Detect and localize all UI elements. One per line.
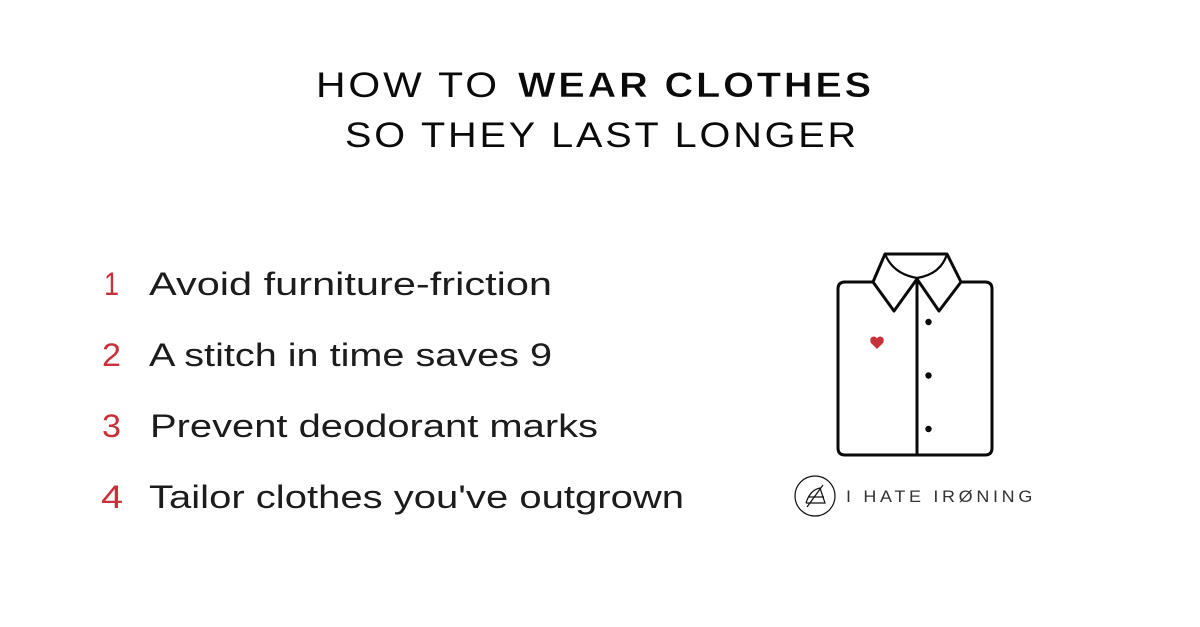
- list item 1: Avoid furniture-friction: [149, 266, 552, 302]
- list item 2: A stitch in time saves 9: [149, 337, 552, 373]
- title: WEAR CLOTHES: [518, 66, 874, 105]
- icon: folded shirt: [838, 254, 992, 455]
- list item 2: 2: [102, 337, 121, 373]
- logo: I hate ironing: [795, 476, 1036, 516]
- title: SO THEY LAST LONGER: [345, 116, 859, 155]
- list item 3: 3: [102, 408, 121, 444]
- shirt body: [838, 282, 992, 455]
- logo wordmark: I HATE IRØNING: [846, 487, 1036, 506]
- title: HOW TO: [316, 66, 500, 105]
- list item 4: 4: [101, 479, 123, 515]
- collar neckline: [885, 254, 947, 278]
- list item 3: Prevent deodorant marks: [150, 408, 598, 444]
- title: [316, 66, 874, 155]
- icon: red heart: [870, 336, 884, 349]
- buttons: [925, 319, 932, 432]
- numbered list: [101, 266, 684, 515]
- logo mark: [795, 476, 835, 516]
- list item 1: 1: [104, 266, 119, 302]
- collar: [873, 254, 961, 311]
- placket line: [916, 279, 918, 455]
- list item 1: [104, 266, 552, 302]
- list item 4: Tailor clothes you've outgrown: [149, 479, 684, 515]
